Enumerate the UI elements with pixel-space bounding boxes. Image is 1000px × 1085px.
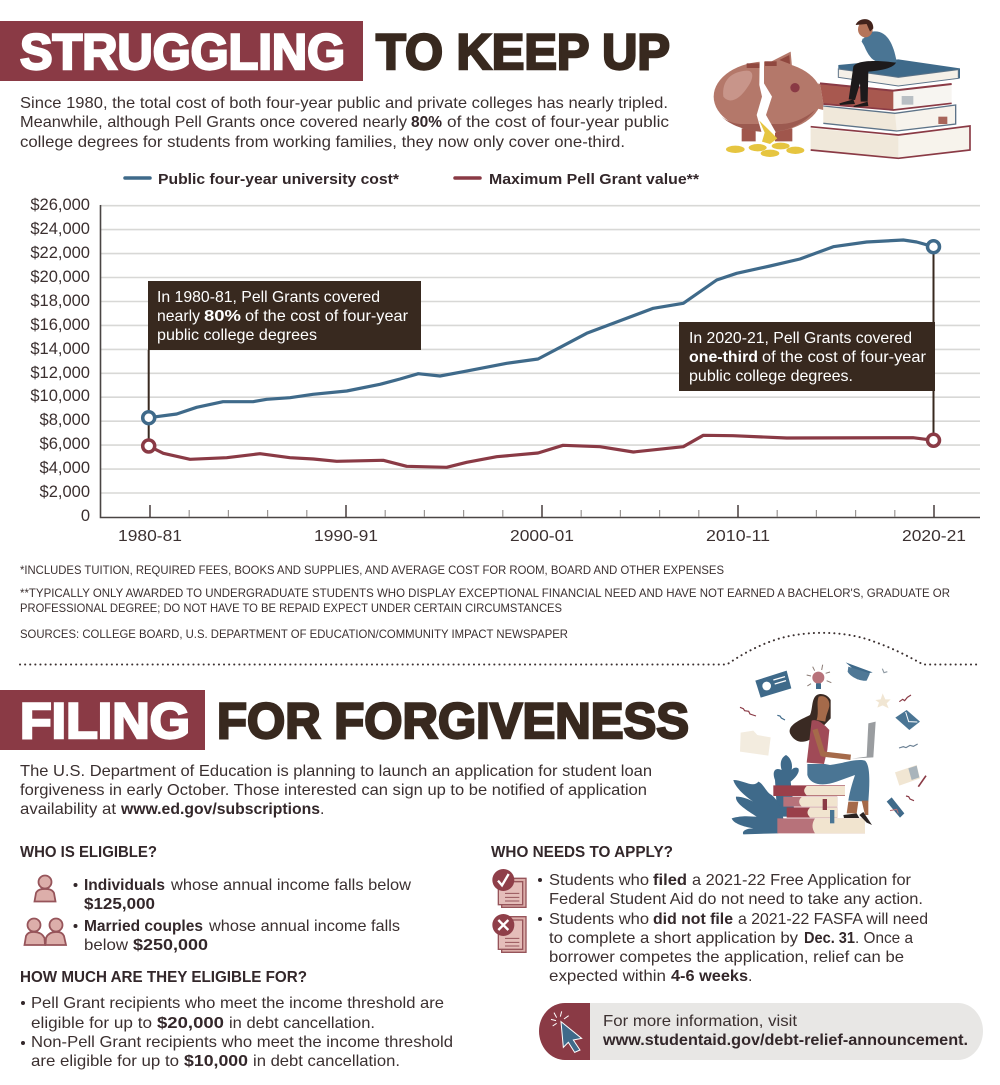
bullet: non-pell recipients: Non-Pell Grant recipients who meet the income threshold xyxy=(31,1034,453,1051)
bullet: filed xyxy=(538,872,923,908)
bullet: non-pell recipients: are eligible for up to xyxy=(31,1053,179,1070)
y axis labels: $18,000 xyxy=(30,292,90,310)
section: how much are they eligible for: HOW MUCH ARE THEY ELIGIBLE FOR? xyxy=(20,969,307,986)
bullet: pell recipients: eligible for up to xyxy=(31,1015,152,1032)
bullet: did not file: to complete a short application by xyxy=(549,930,798,947)
intro text block xyxy=(20,95,669,151)
intro text block: Meanwhile, although Pell Grants once covered nearly xyxy=(20,114,407,131)
bullet: non-pell recipients: $10,000 xyxy=(184,1053,248,1070)
y axis labels: $14,000 xyxy=(30,340,90,358)
intro text block: 80% xyxy=(411,114,442,131)
y axis labels: $10,000 xyxy=(30,387,90,405)
line chart: cost vs pell grant xyxy=(30,196,980,545)
illustration: broken piggy bank and man on books xyxy=(714,19,970,158)
icon: light bulb xyxy=(807,665,831,689)
icon: couple xyxy=(24,918,66,945)
bullet: did not file: a 2021-22 FASFA will need xyxy=(738,911,928,928)
icon: coins xyxy=(726,143,804,157)
intro text block: . xyxy=(320,801,324,818)
x axis labels xyxy=(118,528,966,545)
callout: 2020-21 xyxy=(679,322,935,391)
bullet: individuals: whose annual income falls below xyxy=(170,877,411,894)
callout: more information: For more information, visit xyxy=(603,1013,798,1030)
y axis labels: $26,000 xyxy=(30,196,90,214)
callout leader lines xyxy=(149,247,933,446)
icon: graduation cap xyxy=(846,662,873,681)
intro text block: college degrees for students from working families, they now only cover one-third. xyxy=(20,134,625,151)
line: public university cost xyxy=(149,240,933,418)
legend: public university cost: Public four-year university cost* xyxy=(158,171,399,188)
y axis labels: $22,000 xyxy=(30,244,90,262)
callout: 1980-81: of the cost of four-year xyxy=(245,308,409,325)
footnotes and sources: PROFESSIONAL DEGREE; DO NOT HAVE TO BE REPAID EXPECT UNDER CERTAIN CIRCUMSTANCES xyxy=(20,601,562,615)
title: struggling to keep up: STRUGGLING xyxy=(20,24,345,80)
bullet: non-pell recipients xyxy=(21,1034,453,1070)
panel: struggling to keep up xyxy=(0,19,970,158)
section: who needs to apply xyxy=(491,844,928,985)
x axis labels: 2000-01 xyxy=(510,528,574,545)
illustration: woman with laptop on books xyxy=(732,662,926,834)
icon: seated man xyxy=(839,19,897,107)
bullet: married couples: whose annual income falls xyxy=(208,918,400,935)
bullet: filed: Students who xyxy=(549,872,649,889)
y axis labels: $6,000 xyxy=(40,435,90,453)
bullet: did not file: . Once a xyxy=(855,930,913,947)
icon: stack of books xyxy=(811,59,970,158)
callout: 1980-81: 80% xyxy=(204,308,241,325)
title: filing for forgiveness: FILING xyxy=(20,693,190,749)
bullet: pell recipients: $20,000 xyxy=(157,1015,224,1032)
end markers xyxy=(143,241,939,452)
bullet: filed: Federal Student Aid do not need to take any action. xyxy=(549,891,923,908)
bullet: did not file: Dec. 31 xyxy=(804,930,855,947)
legend: maximum pell grant: Maximum Pell Grant value** xyxy=(489,171,699,188)
bullet: married couples: Married couples xyxy=(84,918,203,935)
squiggles xyxy=(740,669,926,801)
bullet: filed: filed xyxy=(653,872,687,889)
icon: folder xyxy=(740,731,771,756)
bullet: non-pell recipients: in debt cancellation. xyxy=(253,1053,400,1070)
section: who needs to apply: WHO NEEDS TO APPLY? xyxy=(491,844,673,861)
bullet: filed: a 2021-22 Free Application for xyxy=(692,872,912,889)
bullet: pell recipients: in debt cancellation. xyxy=(229,1015,375,1032)
bullet: pell recipients: Pell Grant recipients who meet the income threshold are xyxy=(31,995,444,1012)
icon: cursor xyxy=(551,1011,582,1052)
callout: 2020-21: public college degrees. xyxy=(689,368,853,385)
intro text block xyxy=(20,763,652,818)
callout: 1980-81: public college degrees xyxy=(157,327,317,344)
intro text block: Since 1980, the total cost of both four-year public and private colleges has nearly tripled. xyxy=(20,95,668,112)
title: struggling to keep up xyxy=(0,21,670,81)
y axis labels: $24,000 xyxy=(30,220,90,238)
intro text block: The U.S. Department of Education is planning to launch an application for student loan xyxy=(20,763,652,780)
bullet: married couples: below xyxy=(84,937,128,954)
y axis labels: $20,000 xyxy=(30,268,90,286)
bullet: did not file xyxy=(538,911,928,985)
bullet: individuals: $125,000 xyxy=(84,896,155,913)
icon: diploma xyxy=(887,797,904,818)
bullet: individuals xyxy=(74,877,411,913)
bullet: pell recipients xyxy=(21,995,444,1032)
y axis labels: $16,000 xyxy=(30,316,90,334)
y axis labels: $2,000 xyxy=(40,483,90,501)
callout: 2020-21: one-third xyxy=(689,349,758,366)
line: maximum pell grant xyxy=(149,435,933,467)
intro text block: www.ed.gov/subscriptions xyxy=(120,801,320,818)
panel: filing for forgiveness xyxy=(0,662,983,1070)
x axis labels: 2010-11 xyxy=(706,528,770,545)
icon: stack of books xyxy=(773,785,865,833)
icon: filed document check xyxy=(492,869,526,907)
icon: plants xyxy=(732,755,799,834)
icon: not filed document x xyxy=(492,914,526,952)
bullet: did not file: expected within xyxy=(549,968,666,985)
callout: 1980-81: In 1980-81, Pell Grants covered xyxy=(157,289,380,306)
bullet: did not file: 4-6 weeks xyxy=(671,968,748,985)
icon: individual xyxy=(34,876,56,902)
intro text block: of the cost of four-year public xyxy=(447,114,669,131)
x axis labels: 1980-81 xyxy=(118,528,182,545)
x axis labels: 2020-21 xyxy=(902,528,966,545)
icon: envelope xyxy=(895,710,920,730)
y axis labels: $8,000 xyxy=(40,411,90,429)
title: struggling to keep up: TO KEEP UP xyxy=(376,24,670,80)
icon: star xyxy=(875,693,891,708)
bullet: did not file: did not file xyxy=(653,911,733,928)
icon: id card xyxy=(755,671,791,698)
section: who is eligible: WHO IS ELIGIBLE? xyxy=(20,844,157,861)
bullet: did not file: . xyxy=(748,968,752,985)
bullet: individuals: Individuals xyxy=(84,877,165,894)
footnotes and sources xyxy=(20,563,950,641)
section: who is eligible xyxy=(20,844,411,954)
icon: piggy bank xyxy=(714,52,823,144)
intro text block: availability at xyxy=(20,801,117,818)
bullet: married couples: $250,000 xyxy=(133,937,208,954)
callout: 1980-81: nearly xyxy=(157,308,200,325)
x axis labels: 1990-91 xyxy=(314,528,378,545)
section: how much are they eligible for xyxy=(20,969,453,1070)
y axis labels xyxy=(30,196,90,525)
footnotes and sources: **TYPICALLY ONLY AWARDED TO UNDERGRADUATE STUDENTS WHO DISPLAY EXCEPTIONAL FINANCIAL NEED AND HAVE NOT EARNED A BACHELOR'S, GRADUATE OR xyxy=(20,586,950,600)
axes and ticks xyxy=(100,205,980,518)
y axis labels: $12,000 xyxy=(30,364,90,382)
callout: 2020-21: of the cost of four-year xyxy=(762,349,927,366)
bullet: married couples xyxy=(74,918,400,954)
title: filing for forgiveness xyxy=(0,690,689,750)
footnotes and sources: *INCLUDES TUITION, REQUIRED FEES, BOOKS AND SUPPLIES, AND AVERAGE COST FOR ROOM, BOARD AND OTHER EXPENSES xyxy=(20,563,724,577)
callout: more information xyxy=(539,1003,983,1060)
y axis labels: 0 xyxy=(81,507,90,525)
bullet: did not file: borrower competes the application, relief can be xyxy=(549,949,904,966)
title: filing for forgiveness: FOR FORGIVENESS xyxy=(217,693,689,749)
footnotes and sources: SOURCES: COLLEGE BOARD, U.S. DEPARTMENT OF EDUCATION/COMMUNITY IMPACT NEWSPAPER xyxy=(20,627,568,641)
callout: more information: www.studentaid.gov/debt-relief-announcement. xyxy=(602,1032,968,1049)
icon: seated woman with laptop xyxy=(790,694,876,825)
callout: 1980-81 xyxy=(148,281,421,350)
callout: 2020-21: In 2020-21, Pell Grants covered xyxy=(689,330,912,347)
bullet: did not file: Students who xyxy=(549,911,649,928)
y axis labels: $4,000 xyxy=(40,459,90,477)
icon: document xyxy=(895,765,920,786)
chart legend xyxy=(125,171,699,188)
intro text block: forgiveness in early October. Those interested can sign up to be notified of application xyxy=(20,782,647,799)
